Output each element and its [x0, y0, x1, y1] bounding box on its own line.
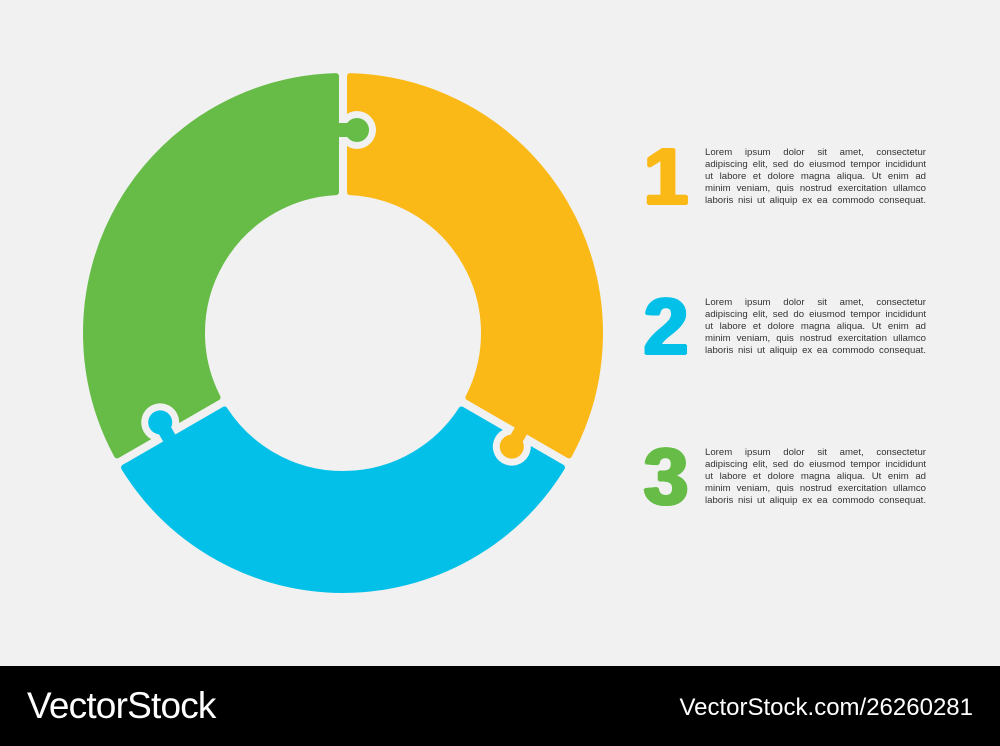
- text block 2: ut labore et dolore magna aliqua. Ut enim ad: [705, 321, 926, 332]
- text block 2: Lorem ipsum dolor sit amet, consectetur: [705, 297, 926, 308]
- number 2: 2: [644, 282, 688, 371]
- text block 1: ut labore et dolore magna aliqua. Ut enim ad: [705, 171, 926, 182]
- number 3: 3: [644, 432, 688, 521]
- footer id: VectorStock.com/26260281: [679, 694, 973, 721]
- segment: green: [0, 49, 445, 455]
- segment: yellow: [350, 76, 600, 455]
- text block 2: laboris nisi ut aliquip ex ea commodo consequat.: [705, 345, 926, 356]
- footer brand: VectorStock: [27, 685, 216, 726]
- text block 2: [705, 297, 926, 356]
- segment: blue: [109, 278, 562, 684]
- text block 1: [705, 147, 926, 206]
- text block 1: laboris nisi ut aliquip ex ea commodo consequat.: [705, 195, 926, 206]
- text block 3: [705, 447, 926, 506]
- text block 3: minim veniam, quis nostrud exercitation ullamco: [705, 483, 926, 494]
- text block 2: adipiscing elit, sed do eiusmod tempor incididunt: [705, 309, 926, 320]
- text block 1: minim veniam, quis nostrud exercitation ullamco: [705, 183, 926, 194]
- number 1: 1: [644, 132, 688, 221]
- text block 3: adipiscing elit, sed do eiusmod tempor incididunt: [705, 459, 926, 470]
- knob: blue into green: [134, 396, 188, 451]
- footer: [0, 666, 1000, 746]
- text block 3: Lorem ipsum dolor sit amet, consectetur: [705, 447, 926, 458]
- knob: green into yellow: [335, 111, 376, 149]
- text block 3: laboris nisi ut aliquip ex ea commodo consequat.: [705, 495, 926, 506]
- text block 2: minim veniam, quis nostrud exercitation ullamco: [705, 333, 926, 344]
- text block 1: Lorem ipsum dolor sit amet, consectetur: [705, 147, 926, 158]
- text block 3: ut labore et dolore magna aliqua. Ut enim ad: [705, 471, 926, 482]
- text block 1: adipiscing elit, sed do eiusmod tempor incididunt: [705, 159, 926, 170]
- knob: yellow into blue: [486, 418, 539, 473]
